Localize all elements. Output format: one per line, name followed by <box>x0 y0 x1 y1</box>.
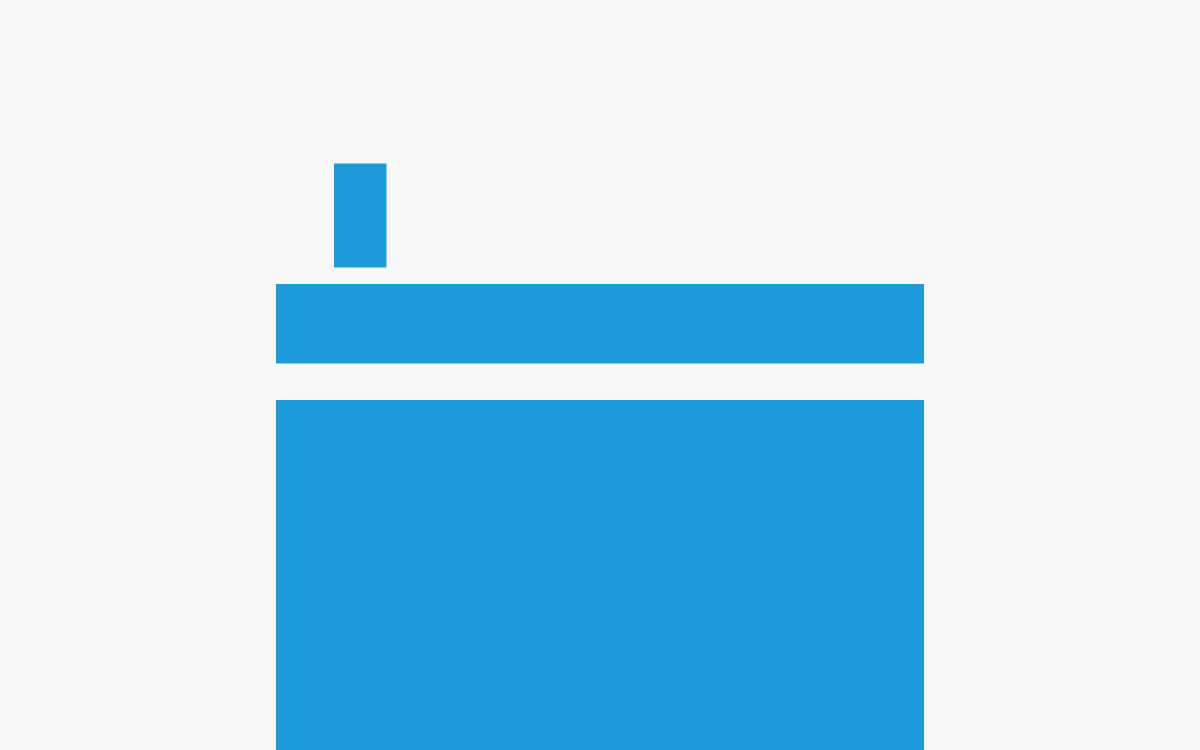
panel: horizontal band <box>276 284 924 364</box>
panel: large block <box>276 400 924 750</box>
panel: small block <box>334 164 386 268</box>
